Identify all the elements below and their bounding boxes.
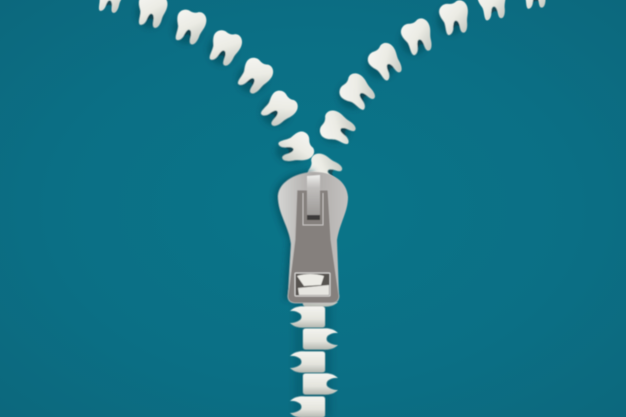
pull tab [307,175,320,220]
column shadow [294,300,332,417]
slider window with teeth [295,273,330,296]
right arm of teeth [317,0,550,148]
slider shadow [274,170,314,300]
tooth shadows right [320,5,465,143]
left arm of teeth [96,0,316,167]
zipped teeth column [290,285,338,417]
slider body [278,172,348,296]
tooth entering slider [305,151,345,189]
tab socket [303,193,323,225]
zipper slider [274,170,348,303]
front plate [288,190,339,303]
tooth shadows left [136,0,308,163]
